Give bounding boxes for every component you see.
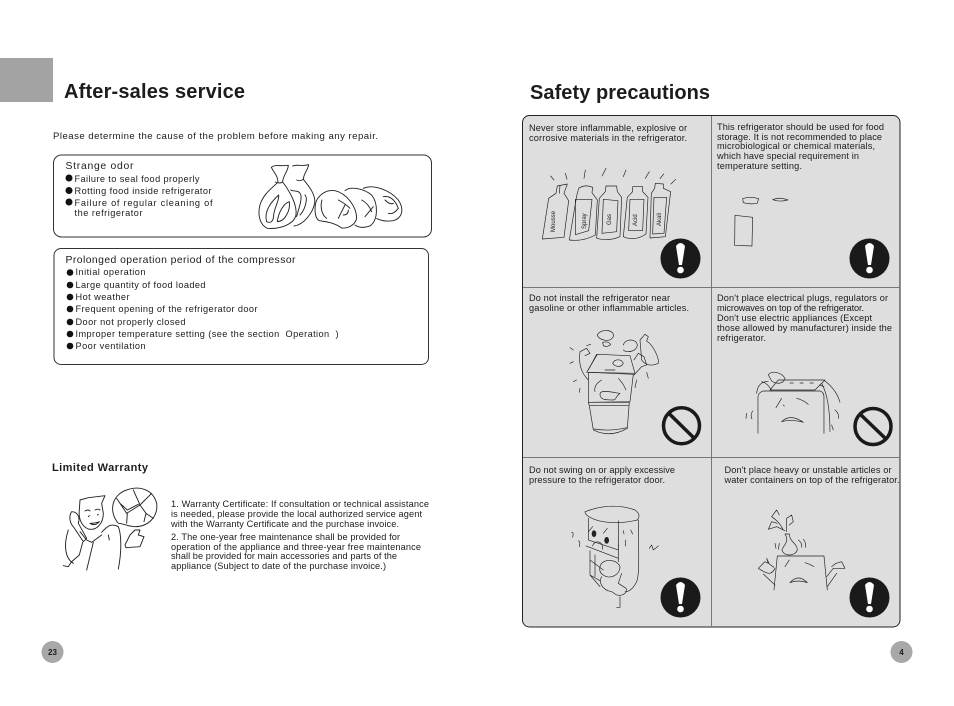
- compressor list: [67, 267, 338, 351]
- compressor list: Door not properly closed: [76, 317, 186, 327]
- icon: bottles: [542, 168, 676, 240]
- intro text: Please determine the cause of the problem before making any repair.: [53, 131, 378, 142]
- cell text: [717, 293, 892, 343]
- page number 23: [42, 641, 64, 663]
- cell text: corrosive materials in the refrigerator.: [529, 133, 687, 143]
- strange odor list: the refrigerator: [74, 208, 142, 218]
- cell text: microwaves on top of the refrigerator.: [717, 303, 864, 313]
- cell text: Don't place electrical plugs, regulators or: [717, 293, 888, 303]
- cell: swing on door: [529, 465, 700, 618]
- cell: heavy articles: [724, 465, 900, 618]
- warranty text: operation of the appliance and three-year free maintenance: [171, 542, 421, 552]
- cell text: Never store inflammable, explosive or: [529, 123, 687, 133]
- compressor heading: Prolonged operation period of the compressor: [66, 255, 296, 266]
- icon: warning: [660, 238, 700, 278]
- icon: warning: [850, 238, 890, 278]
- warranty text: [170, 499, 429, 571]
- bottle labels: Mousse: [551, 210, 557, 232]
- cell text: [716, 122, 884, 171]
- strange odor heading: Strange odor: [66, 161, 134, 172]
- icon: child swinging on door: [572, 506, 658, 607]
- icon: fridge with vase: [758, 510, 845, 590]
- cell text: those allowed by manufacturer) inside the: [717, 323, 892, 333]
- icon: prohibited: [855, 408, 891, 444]
- cell text: refrigerator.: [717, 333, 766, 343]
- icon: warning: [660, 578, 700, 618]
- heading: after-sales service: After-sales service: [64, 81, 245, 103]
- cell: inflammable storage: [529, 123, 700, 278]
- strange odor list: Failure to seal food properly: [74, 174, 200, 184]
- bottle labels: Akali: [657, 213, 663, 226]
- cell: food storage only: [716, 122, 890, 278]
- strange odor list: Rotting food inside refrigerator: [74, 186, 212, 196]
- cell text: Do not install the refrigerator near: [529, 293, 670, 303]
- warranty text: is needed, please provide the local authorized service agent: [171, 509, 422, 519]
- compressor list: Improper temperature setting (see the section Operation ): [76, 329, 338, 339]
- icon: scared fridge with spray: [570, 330, 658, 434]
- compressor list: Hot weather: [76, 292, 130, 302]
- cell text: [529, 123, 687, 143]
- heading: limited warranty: Limited Warranty: [52, 462, 149, 474]
- cell text: pressure to the refrigerator door.: [529, 475, 665, 485]
- bottle labels: Gas: [607, 214, 613, 225]
- bottle labels: [551, 210, 663, 232]
- panel: prolonged compressor operation: [54, 248, 428, 364]
- panel: strange odor: [54, 155, 432, 237]
- compressor list: Large quantity of food loaded: [76, 280, 206, 290]
- panel: safety precautions grid: [522, 116, 900, 627]
- cell text: This refrigerator should be used for food: [717, 122, 884, 132]
- warranty text: 1. Warranty Certificate: If consultation or technical assistance: [171, 499, 429, 509]
- cell text: water containers on top of the refrigerator.: [724, 475, 900, 485]
- page number 4: 4: [899, 648, 904, 657]
- page number 4: [890, 641, 912, 663]
- icon: man on phone: [63, 488, 157, 570]
- cell text: Do not swing on or apply excessive: [529, 465, 675, 475]
- cell: electrical plugs: [717, 293, 892, 444]
- cell text: Don't use electric appliances (Except: [717, 313, 872, 323]
- compressor list: Poor ventilation: [76, 341, 146, 351]
- warranty text: with the Warranty Certificate and the purchase invoice.: [170, 519, 399, 529]
- page corner tab: [0, 58, 53, 102]
- page number 23: 23: [48, 648, 57, 657]
- bottle labels: Spray: [582, 213, 588, 229]
- cell text: [529, 465, 675, 485]
- cell text: microbiological or chemical materials,: [717, 141, 875, 151]
- icon: containers: [735, 197, 788, 246]
- warranty text: shall be provided for main accessories and parts of the: [171, 551, 397, 561]
- icon: food bags: [259, 165, 402, 228]
- bottle labels: Acid: [633, 214, 639, 226]
- icon: prohibited: [664, 408, 700, 444]
- heading: safety precautions: Safety precautions: [530, 82, 710, 104]
- compressor list: Frequent opening of the refrigerator door: [76, 304, 258, 314]
- cell text: [529, 293, 689, 313]
- icon: warning: [850, 578, 890, 618]
- cell text: which have special requirement in: [716, 151, 859, 161]
- cell text: Don't place heavy or unstable articles or: [724, 465, 892, 475]
- icon: fridge with power strip: [746, 372, 840, 433]
- cell text: storage. It is not recommended to place: [717, 132, 882, 142]
- strange odor list: [66, 174, 213, 218]
- cell: gasoline: [529, 293, 700, 444]
- strange odor list: Failure of regular cleaning of: [74, 198, 213, 208]
- compressor list: Initial operation: [76, 267, 146, 277]
- cell text: [724, 465, 900, 485]
- warranty text: appliance (Subject to date of the purchase invoice.): [171, 561, 386, 571]
- cell text: temperature setting.: [717, 161, 802, 171]
- cell text: gasoline or other inflammable articles.: [529, 303, 689, 313]
- warranty text: 2. The one-year free maintenance shall be provided for: [171, 532, 400, 542]
